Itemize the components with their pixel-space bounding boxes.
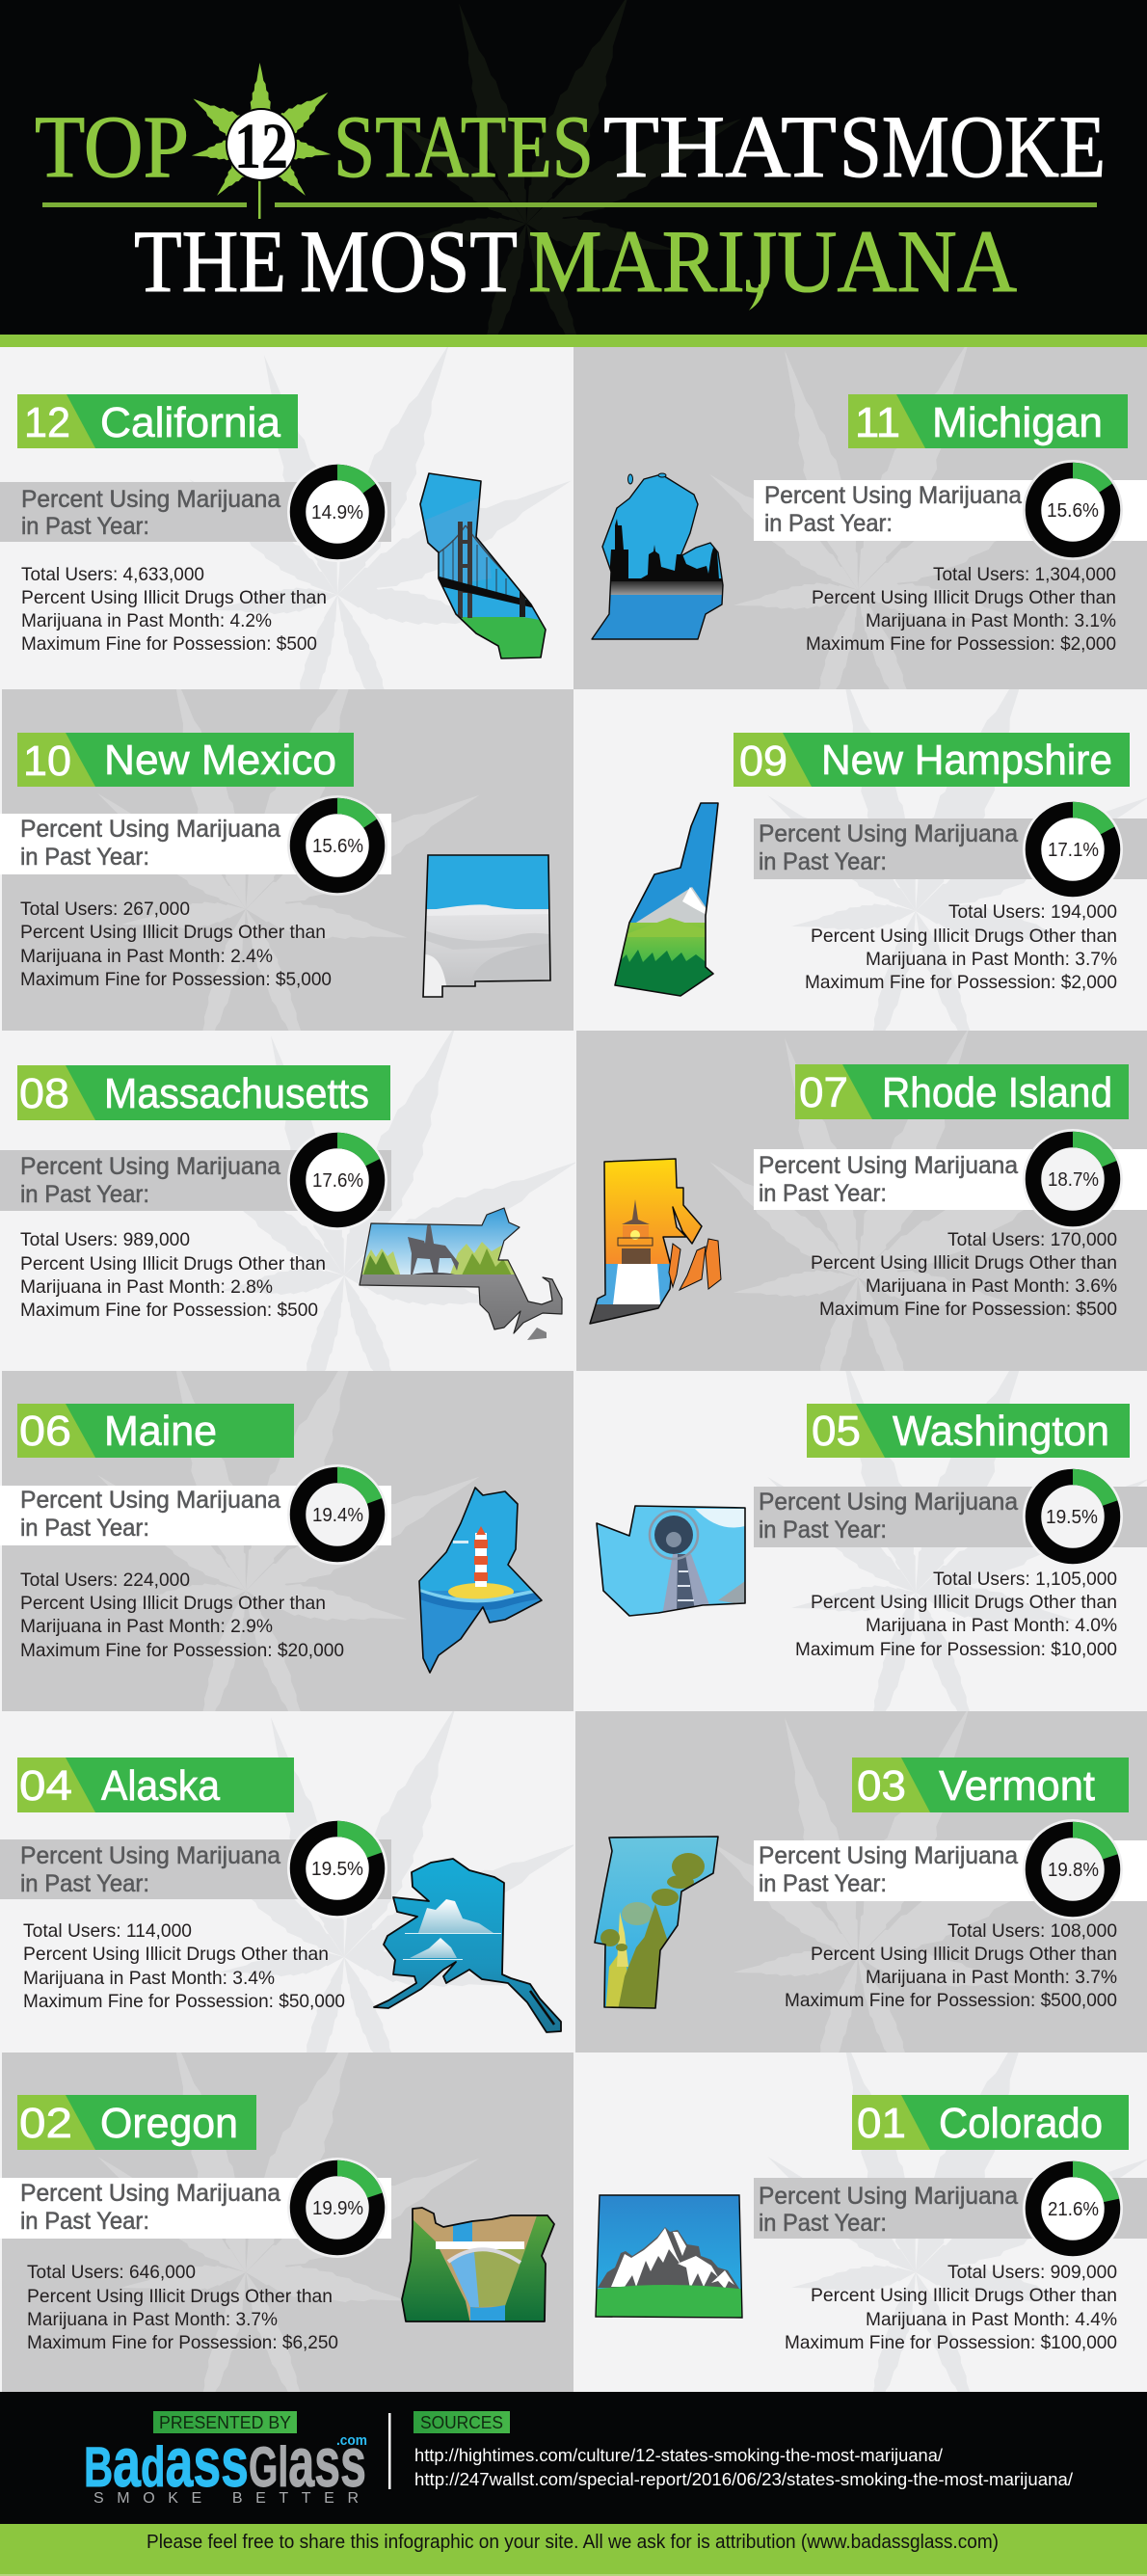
title line 2: MARIJUANA <box>528 212 1017 310</box>
banner: Washington <box>807 1404 1130 1458</box>
stat band <box>754 1487 1147 1547</box>
donut 14.9%: 14.9% <box>311 502 363 523</box>
stat band <box>0 814 391 874</box>
details: Maximum Fine for Possession: $2,000 <box>806 633 1116 655</box>
details: Maximum Fine for Possession: $500,000 <box>785 1990 1117 2011</box>
details: Maximum Fine for Possession: $6,250 <box>27 2332 338 2353</box>
stat band: Percent Using Marijuana <box>20 1842 280 1869</box>
stat band <box>0 1486 391 1545</box>
banner: Vermont <box>852 1758 1129 1812</box>
details: Marijuana in Past Month: 4.0% <box>866 1615 1117 1636</box>
donut 15.6%: 15.6% <box>312 836 363 857</box>
banner: Colorado: 01 <box>857 2100 906 2147</box>
details: Maximum Fine for Possession: $10,000 <box>795 1639 1117 1660</box>
banner: New Hampshire <box>734 733 1130 787</box>
details: Total Users: 170,000 <box>947 1229 1117 1250</box>
details <box>27 2262 338 2353</box>
details: Percent Using Illicit Drugs Other than <box>21 587 327 608</box>
stat band <box>754 1840 1147 1901</box>
details: Total Users: 194,000 <box>948 901 1117 923</box>
banner: Oregon: 02 <box>19 2100 72 2147</box>
banner: Alaska: Alaska <box>101 1762 220 1810</box>
title line 1: STATES <box>333 97 594 196</box>
donut 19.4% <box>287 1464 387 1565</box>
details: Maximum Fine for Possession: $50,000 <box>23 1991 345 2012</box>
banner: Rhode Island: 07 <box>799 1069 848 1116</box>
map: Maine with lighthouse <box>414 1485 545 1677</box>
details: Total Users: 989,000 <box>20 1229 190 1250</box>
banner: Massachusetts <box>17 1065 390 1120</box>
details: Marijuana in Past Month: 3.1% <box>866 610 1116 631</box>
panel: 12 California <box>0 347 571 689</box>
banner: Maine: Maine <box>104 1408 217 1455</box>
donut 15.6% <box>1023 460 1123 560</box>
sources tag: SOURCES <box>420 2413 503 2432</box>
stat band <box>754 2178 1147 2239</box>
title line 2: THE <box>134 212 286 310</box>
banner: Massachusetts: Massachusetts <box>104 1070 369 1117</box>
panel: 10 New Mexico <box>0 689 574 1031</box>
map: Colorado with mountain <box>593 2193 747 2323</box>
panel: 11 Michigan <box>574 347 1147 689</box>
details: Marijuana in Past Month: 4.4% <box>866 2309 1117 2330</box>
details: Total Users: 224,000 <box>20 1570 190 1591</box>
banner: California: California <box>100 399 281 446</box>
title line 1: THAT <box>603 97 837 196</box>
details: Total Users: 1,304,000 <box>933 564 1116 585</box>
panel: 02 Oregon <box>0 2053 574 2392</box>
details <box>23 1920 345 2012</box>
stat band <box>0 482 391 542</box>
stat band: Percent Using Marijuana <box>759 1152 1018 1179</box>
details: Marijuana in Past Month: 2.4% <box>20 946 273 967</box>
details <box>785 2262 1117 2353</box>
leaf badge with number 12 <box>186 63 335 219</box>
banner: New Mexico <box>17 733 354 787</box>
banner: Oregon: Oregon <box>100 2100 238 2147</box>
stat band: in Past Year: <box>759 1516 887 1543</box>
stat band: Percent Using Marijuana <box>20 1153 280 1180</box>
donut 17.6%: 17.6% <box>312 1170 363 1192</box>
stat band <box>754 480 1147 541</box>
donut 18.7% <box>1023 1129 1123 1229</box>
panel: 08 Massachusetts <box>0 1031 575 1371</box>
source links <box>414 2445 1074 2489</box>
stat band: in Past Year: <box>759 1180 887 1207</box>
logo: BadassGlass: Glass <box>249 2425 366 2502</box>
background leaf <box>231 0 740 335</box>
details: Percent Using Illicit Drugs Other than <box>20 1253 326 1275</box>
details: Marijuana in Past Month: 3.6% <box>866 1275 1117 1297</box>
details: Percent Using Illicit Drugs Other than <box>811 1592 1117 1613</box>
details: Marijuana in Past Month: 3.7% <box>27 2309 278 2330</box>
map: Washington with Space Needle <box>593 1504 747 1620</box>
details: Total Users: 909,000 <box>947 2262 1117 2283</box>
donut 19.5%: 19.5% <box>1046 1507 1098 1528</box>
header <box>0 0 1147 388</box>
stat band: in Past Year: <box>759 2210 887 2237</box>
details: Total Users: 4,633,000 <box>21 564 204 585</box>
stat band <box>754 818 1147 879</box>
banner: Alaska <box>17 1758 294 1812</box>
donut 19.9%: 19.9% <box>312 2198 363 2219</box>
banner: Washington: Washington <box>893 1408 1109 1455</box>
stat band: Percent Using Marijuana <box>20 1487 280 1514</box>
stat band <box>754 1149 1147 1210</box>
donut 17.1%: 17.1% <box>1048 840 1099 861</box>
banner: Massachusetts: 08 <box>19 1070 69 1117</box>
details <box>20 1229 326 1321</box>
logo: BadassGlass <box>84 2425 367 2507</box>
details: Total Users: 646,000 <box>27 2262 196 2283</box>
stat band: Percent Using Marijuana <box>759 2183 1018 2210</box>
details <box>20 899 332 990</box>
stat band: in Past Year: <box>764 510 893 537</box>
stat band: Percent Using Marijuana <box>759 1842 1018 1869</box>
donut 17.6% <box>287 1130 387 1230</box>
panel: 06 Maine <box>0 1371 574 1711</box>
details <box>21 564 327 655</box>
stat band: in Past Year: <box>759 1870 887 1897</box>
banner: Rhode Island <box>795 1064 1129 1119</box>
banner: Alaska: 04 <box>19 1762 72 1810</box>
title line 2: MOST <box>300 212 518 310</box>
title line 2 <box>134 212 1017 310</box>
details: Maximum Fine for Possession: $500 <box>819 1299 1117 1320</box>
map: Michigan with skyline <box>588 472 728 643</box>
donut 19.9% <box>287 2158 387 2258</box>
stat band <box>0 2178 391 2239</box>
banner: California: 12 <box>24 399 70 446</box>
details: Percent Using Illicit Drugs Other than <box>812 587 1116 608</box>
donut 17.1% <box>1023 799 1123 899</box>
details: Percent Using Illicit Drugs Other than <box>811 2285 1117 2306</box>
title line 1: SMOKE <box>840 97 1106 196</box>
details: Percent Using Illicit Drugs Other than <box>811 926 1117 947</box>
stat band: in Past Year: <box>20 2208 149 2235</box>
panel: 01 Colorado <box>595 2053 1147 2392</box>
donut 19.5% <box>287 1818 387 1919</box>
footer <box>0 2392 1147 2524</box>
details: Marijuana in Past Month: 3.7% <box>866 1967 1117 1988</box>
source links: http://hightimes.com/culture/12-states-smoking-the-most-marijuana/ <box>414 2445 944 2465</box>
donut 19.8%: 19.8% <box>1048 1860 1099 1881</box>
donut 14.9% <box>287 462 387 562</box>
stat band: in Past Year: <box>20 1181 149 1208</box>
stat band: Percent Using Marijuana <box>764 482 1022 509</box>
banner: New Hampshire: New Hampshire <box>821 737 1112 784</box>
banner: New Mexico: New Mexico <box>104 737 336 784</box>
leaf badge with number 12: 12 <box>234 109 288 182</box>
presented by tag: PRESENTED BY <box>159 2413 291 2432</box>
donut 19.4%: 19.4% <box>312 1505 363 1526</box>
stat band: Percent Using Marijuana <box>759 820 1018 847</box>
details <box>795 1569 1117 1660</box>
banner: Washington: 05 <box>812 1408 861 1455</box>
donut 15.6% <box>287 795 387 896</box>
donut 21.6%: 21.6% <box>1048 2199 1099 2220</box>
donut 19.5% <box>1023 1466 1123 1567</box>
details: Total Users: 108,000 <box>947 1920 1117 1942</box>
map: Alaska with icebergs <box>371 1856 564 2039</box>
details: Total Users: 267,000 <box>20 899 190 920</box>
map: New Hampshire <box>612 800 718 1000</box>
details: Percent Using Illicit Drugs Other than <box>811 1252 1117 1274</box>
details: Maximum Fine for Possession: $100,000 <box>785 2332 1117 2353</box>
stat band: Percent Using Marijuana <box>20 816 280 843</box>
attribution bar <box>0 2524 1147 2576</box>
banner: Vermont: Vermont <box>939 1762 1095 1810</box>
panel: 04 Alaska <box>0 1711 574 2053</box>
banner: Michigan: Michigan <box>932 399 1103 446</box>
details: Marijuana in Past Month: 2.8% <box>20 1276 273 1298</box>
details <box>811 1229 1117 1320</box>
map: California with Golden Gate <box>419 472 547 659</box>
stat band: Percent Using Marijuana <box>759 1489 1018 1516</box>
details: Percent Using Illicit Drugs Other than <box>20 922 326 943</box>
panel: 03 Vermont <box>575 1711 1147 2053</box>
banner: Vermont: 03 <box>857 1762 906 1810</box>
map: Oregon with bridge <box>400 2203 559 2323</box>
stat band: in Past Year: <box>20 1870 149 1897</box>
logo: BadassGlass: Badass <box>84 2425 249 2502</box>
details <box>20 1570 344 1661</box>
attribution bar: Please feel free to share this infographic on your site. All we ask for is attribution (www.badassglass.com) <box>147 2532 999 2553</box>
banner: Michigan <box>848 394 1128 448</box>
title line 1 <box>35 97 1106 196</box>
details: Percent Using Illicit Drugs Other than <box>20 1593 326 1614</box>
donut 19.5%: 19.5% <box>311 1859 363 1880</box>
details <box>785 1920 1117 2011</box>
stat band: in Past Year: <box>21 513 149 540</box>
donut 15.6%: 15.6% <box>1047 500 1099 522</box>
map: Vermont with trees <box>593 1832 723 2015</box>
details: Percent Using Illicit Drugs Other than <box>23 1944 329 1965</box>
banner: Maine <box>17 1404 294 1458</box>
banner: Colorado: Colorado <box>939 2100 1103 2147</box>
details: Percent Using Illicit Drugs Other than <box>811 1944 1117 1965</box>
banner: New Hampshire: 09 <box>739 738 787 785</box>
donut 18.7%: 18.7% <box>1048 1169 1099 1191</box>
details: Marijuana in Past Month: 4.2% <box>21 610 272 631</box>
stat band: in Past Year: <box>20 1515 149 1542</box>
banner: Maine: 06 <box>19 1408 71 1455</box>
stat band: in Past Year: <box>20 844 149 871</box>
banner: New Mexico: 10 <box>23 738 71 785</box>
details: Maximum Fine for Possession: $500 <box>20 1300 318 1321</box>
panel: 07 Rhode Island <box>576 1031 1147 1371</box>
details: Total Users: 114,000 <box>23 1920 192 1942</box>
details: Marijuana in Past Month: 3.7% <box>866 949 1117 970</box>
donut 19.8% <box>1023 1819 1123 1919</box>
source links: http://247wallst.com/special-report/2016/06/23/states-smoking-the-most-marijuana/ <box>414 2469 1074 2489</box>
stat band <box>0 1150 391 1211</box>
details: Marijuana in Past Month: 3.4% <box>23 1968 275 1989</box>
details: Maximum Fine for Possession: $20,000 <box>20 1640 344 1661</box>
stat band: Percent Using Marijuana <box>21 486 280 513</box>
details: Maximum Fine for Possession: $5,000 <box>20 969 332 990</box>
banner: Michigan: 11 <box>855 399 900 446</box>
details: Marijuana in Past Month: 2.9% <box>20 1616 273 1637</box>
stat band: in Past Year: <box>759 848 887 875</box>
details: Total Users: 1,105,000 <box>933 1569 1117 1590</box>
map: Rhode Island with lighthouse <box>588 1157 721 1327</box>
title line 1: TOP <box>35 97 189 196</box>
panel: 09 New Hampshire <box>614 689 1147 1031</box>
logo: BadassGlass: SMOKE BETTER <box>93 2490 359 2507</box>
banner: Colorado <box>852 2095 1129 2150</box>
stat band <box>0 1839 391 1899</box>
map: Massachusetts with statue <box>352 1205 569 1342</box>
details <box>805 901 1117 993</box>
donut 21.6% <box>1023 2159 1123 2259</box>
banner: California <box>17 394 298 448</box>
banner: Rhode Island: Rhode Island <box>882 1069 1112 1116</box>
details: Percent Using Illicit Drugs Other than <box>27 2286 333 2307</box>
panel: 05 Washington <box>596 1371 1147 1711</box>
banner: Oregon <box>17 2095 256 2150</box>
map: New Mexico dunes <box>419 853 554 1003</box>
logo: BadassGlass: .com <box>336 2432 367 2449</box>
details <box>806 564 1116 655</box>
details: Maximum Fine for Possession: $2,000 <box>805 972 1117 993</box>
details: Maximum Fine for Possession: $500 <box>21 633 317 655</box>
stat band: Percent Using Marijuana <box>20 2180 280 2207</box>
